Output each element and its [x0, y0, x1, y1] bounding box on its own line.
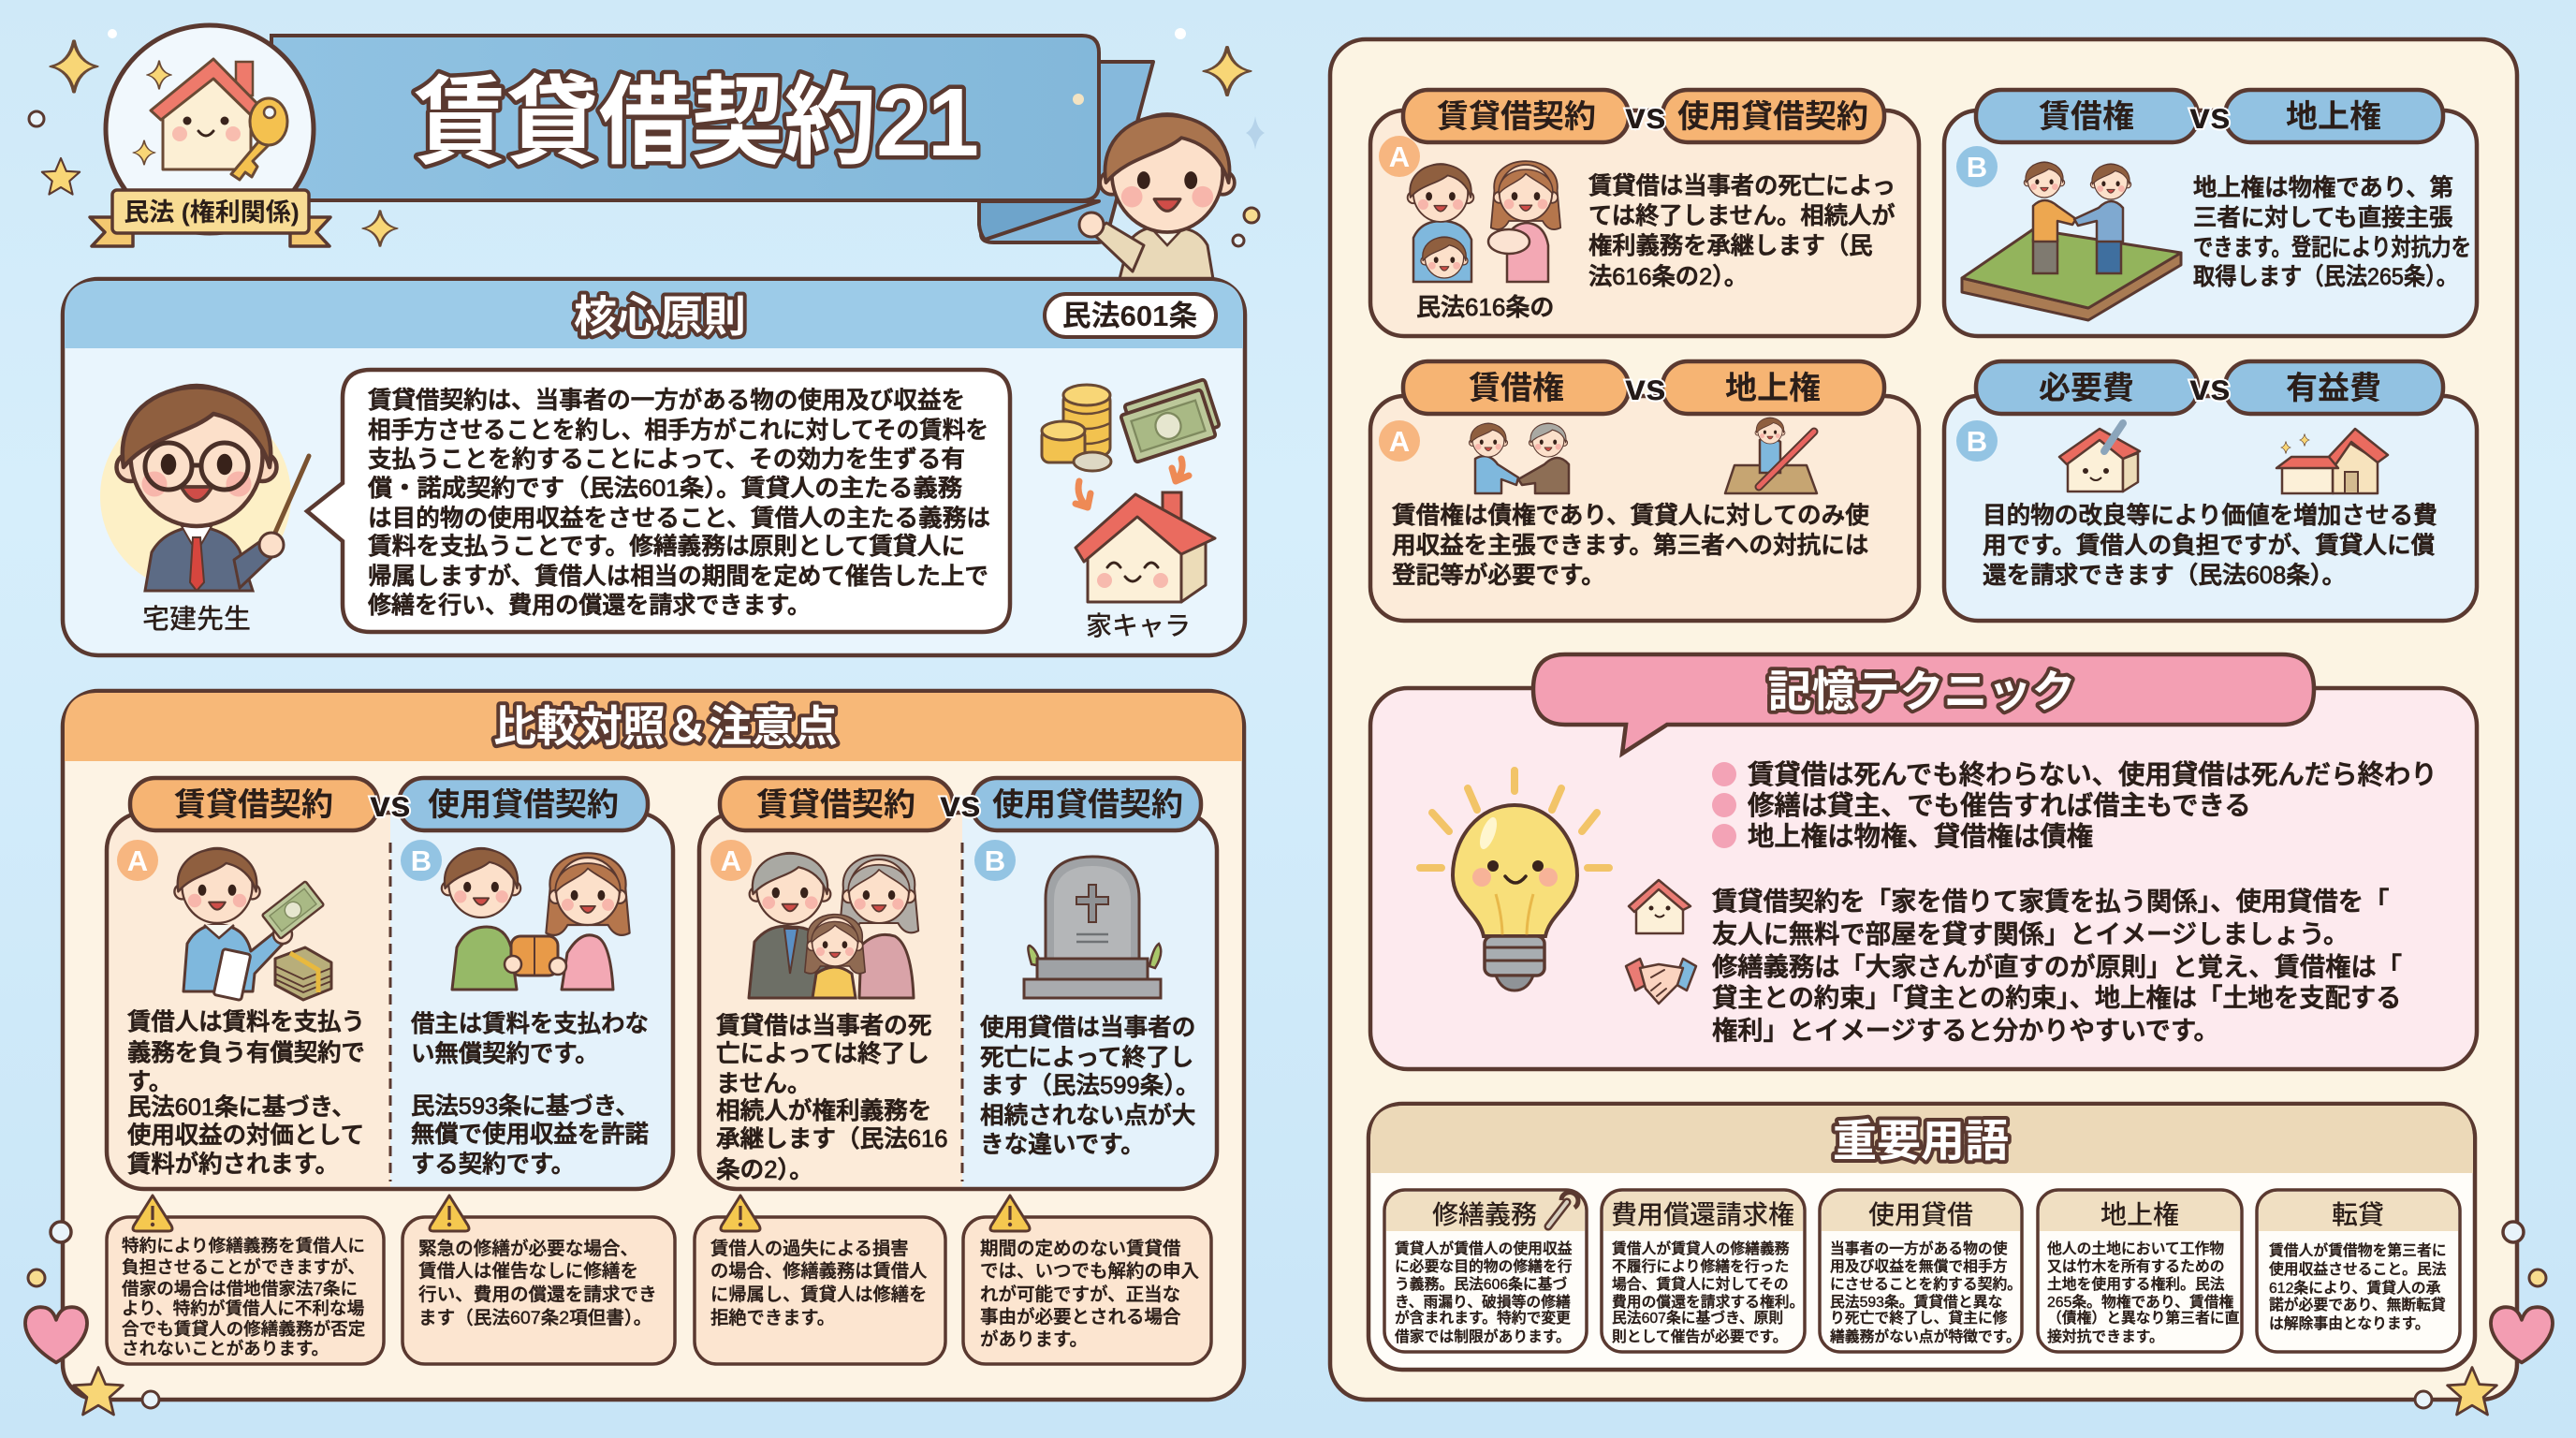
text: 取得します（民法265条）。 [2193, 264, 2458, 290]
badge B [1956, 420, 1998, 462]
speech bubble: 相手方させることを約し、相手方がこれに対してその賃料を [368, 418, 988, 444]
illustration: handshake with landlord [1469, 423, 1569, 493]
text: analogy: 友人に無料で部屋を貸す関係」とイメージしましょう。 [1712, 919, 2349, 948]
tab: 使用貸借契約: 使用貸借契約 [1677, 99, 1868, 135]
term card: 費用償還請求権: 則として催告が必要です。 [1612, 1328, 1788, 1345]
icon: coins and bills [1042, 379, 1220, 507]
badge A [117, 840, 158, 881]
warning note 1: されないことがあります。 [122, 1339, 329, 1358]
text: loan ends at death: きな違いです。 [980, 1131, 1145, 1158]
text: 賃借権は債権であり、賃貸人に対してのみ使 [1392, 502, 1869, 529]
text: loan ends at death: ます（民法599条）。 [980, 1072, 1200, 1099]
text: free loan contract: する契約です。 [411, 1152, 575, 1178]
tab: 賃貸借契約: 賃貸借契約 [1437, 99, 1596, 135]
category ribbon badge [90, 190, 330, 246]
term card: 地上権: 他人の土地において工作物 [2047, 1240, 2224, 1257]
card: lease right vs superficies [1944, 90, 2477, 336]
term card: 転貸: 諾が必要であり、無断転貸 [2269, 1296, 2446, 1313]
icon: warning triangle [990, 1196, 1030, 1231]
caption: 民法616条の [1416, 293, 1554, 321]
bullets: 賃貸借は死んでも終わらない、使用貸借は死んだら終わり [1748, 760, 2437, 790]
term card: 修繕義務: 賃貸人が賃借人の使用収益 [1395, 1240, 1573, 1257]
text: rent contract: 賃借人は賃料を支払う [127, 1009, 365, 1035]
term card: 転貸: 転貸 [2332, 1200, 2384, 1229]
core principle header bar [65, 281, 1243, 348]
term card: 地上権: 265条。物権であり、賃借権 [2047, 1294, 2234, 1311]
icon: warning triangle [721, 1196, 760, 1231]
term card: 費用償還請求権: 民法607条に基づき、原則 [1612, 1310, 1783, 1327]
text: analogy: 貸主との約束」「貸主との約束」、地上権は「土地を支配する [1712, 983, 2401, 1012]
bullets [1712, 760, 2437, 852]
heading: 重要用語: 重要用語 [1833, 1116, 2009, 1166]
text: analogy: 権利」とイメージすると分かりやすいです。 [1712, 1016, 2219, 1045]
warning note 1: 合でも賃貸人の修繕義務が否定 [122, 1319, 365, 1339]
card: necessary vs beneficial expenses [1944, 361, 2477, 621]
icon: warning triangle [430, 1196, 469, 1231]
text: ては終了しません。相続人が [1588, 203, 1895, 229]
illustration: lending for free [442, 848, 630, 990]
warning note 4 [963, 1196, 1211, 1364]
vs: vs [1625, 96, 1666, 137]
text: analogy: 賃貸借契約を「家を借りて家賃を払う関係」、使用貸借を「 [1712, 887, 2389, 916]
warning note 3: の場合、修繕義務は賃借人 [710, 1261, 927, 1282]
text: 登記等が必要です。 [1392, 562, 1605, 589]
text: lease survives death: 賃貸借は当事者の死 [716, 1012, 931, 1039]
speech bubble: 修繕を行い、費用の償還を請求できます。 [368, 593, 811, 619]
tab: 使用貸借契約 [399, 778, 648, 830]
tab: 賃貸借契約 [1403, 90, 1629, 142]
term card: 費用償還請求権: 不履行により修繕を行った [1612, 1258, 1789, 1275]
logo: house and key emblem [106, 25, 314, 233]
vs: vs [940, 785, 981, 825]
term card: 使用貸借: にさせることを約する契約。 [1830, 1276, 2022, 1293]
badge A [710, 840, 752, 881]
term card: 費用償還請求権 [1602, 1190, 1805, 1352]
tab: 賃貸借契約: 賃貸借契約 [174, 787, 333, 823]
term card: 費用償還請求権: 場合、賃貸人に対してその [1612, 1276, 1789, 1293]
text: 賃貸借は当事者の死亡によっ [1588, 173, 1895, 199]
vs: vs [370, 785, 411, 825]
text: 目的物の改良等により価値を増加させる費 [1983, 502, 2437, 529]
heading: 核心原則: 核心原則 [574, 292, 746, 341]
badge A [1379, 420, 1420, 462]
tab: 賃借権 [1403, 361, 1629, 414]
label: 宅建先生: 宅建先生 [142, 604, 251, 635]
header decorations [29, 28, 1265, 246]
comparison card 1 [107, 778, 673, 1189]
warning note 4: があります。 [980, 1329, 1088, 1350]
term card: 転貸: 612条により、賃貸人の承 [2269, 1280, 2441, 1297]
panel: memory technique [1370, 654, 2477, 1069]
warning note 1: 特約により修繕義務を賃借人に [122, 1236, 365, 1255]
vs: vs [2189, 96, 2231, 137]
illustration: repaired house [2059, 423, 2140, 492]
text: 三者に対しても直接主張 [2193, 205, 2452, 231]
term card: 修繕義務 [1384, 1190, 1587, 1352]
warning note 2: 賃借人は催告なしに修繕を [418, 1261, 638, 1282]
warning note 2: 行い、費用の償還を請求でき [418, 1284, 657, 1305]
term card: 地上権: 地上権 [2100, 1200, 2179, 1229]
text: lease survives death: 条の2）。 [716, 1156, 813, 1183]
text: free loan contract: 民法593条に基づき、 [411, 1093, 639, 1120]
badge A: A [1389, 425, 1410, 458]
term card: 転貸: 賃借人が賃借物を第三者に [2269, 1241, 2447, 1259]
heading: 比較対照＆注意点: 比較対照＆注意点 [493, 702, 838, 751]
character: waving boy [1079, 114, 1235, 279]
warning note 1: 負担させることができますが、 [122, 1257, 365, 1277]
warning note 1 [107, 1196, 384, 1364]
illustration: heirs [749, 853, 918, 998]
icon: handshake [1626, 959, 1696, 1004]
badge A: A [721, 844, 741, 877]
text: lease survives death: 亡によっては終了し [716, 1040, 929, 1067]
tab: 使用貸借契約 [972, 778, 1201, 830]
text: rent contract: 義務を負う有償契約で [127, 1040, 365, 1066]
text: lease survives death: 相続人が権利義務を [716, 1097, 931, 1124]
badge A: A [1389, 140, 1410, 173]
text: rent contract: す。 [127, 1069, 172, 1095]
tab: 地上権 [2225, 90, 2443, 142]
illustration: gravestone [1024, 857, 1161, 998]
term card: 修繕義務: 修繕義務 [1432, 1200, 1537, 1229]
icon: smiling light bulb [1420, 770, 1609, 990]
tab: 賃借権: 賃借権 [1469, 371, 1564, 406]
warning note 4: れが可能ですが、正当な [980, 1284, 1180, 1305]
warning note 3: 拒絶できます。 [710, 1308, 835, 1328]
term card: 地上権: 接対抗できます。 [2047, 1328, 2164, 1345]
term card: 修繕義務: う義務。民法606条に基づ [1395, 1276, 1568, 1293]
bullets: 地上権は物権、貸借権は債権 [1748, 822, 2093, 852]
character: house [1076, 492, 1215, 602]
warning note 3: に帰属し、賃貸人は修繕を [710, 1284, 927, 1305]
term card: 使用貸借: り死亡で終了し、貸主に修 [1830, 1310, 2008, 1327]
term card: 費用償還請求権: 費用償還請求権 [1611, 1200, 1794, 1229]
panel: comparison and notes [63, 691, 1244, 1400]
banner body [271, 36, 1099, 200]
term card: 使用貸借 [1820, 1190, 2022, 1352]
tab: 賃貸借契約: 賃貸借契約 [756, 787, 915, 823]
illustration: digging on land [1725, 418, 1817, 493]
tab: 賃借権: 賃借権 [2039, 99, 2134, 135]
term card: 転貸: は解除事由となります。 [2269, 1315, 2430, 1332]
term card: 転貸 [2257, 1190, 2460, 1352]
text: loan ends at death: 相続されない点が大 [980, 1102, 1195, 1129]
text: 用収益を主張できます。第三者への対抗には [1392, 532, 1868, 559]
tab: 賃貸借契約 [130, 778, 378, 830]
tab: 有益費 [2225, 361, 2443, 414]
warning note 2 [402, 1196, 675, 1364]
term card: 使用貸借: 繕義務がない点が特徴です。 [1830, 1328, 2021, 1345]
term card: 地上権 [2038, 1190, 2242, 1352]
category ribbon badge: 民法 (権利関係) [124, 198, 300, 227]
vs: vs [1625, 368, 1666, 408]
term card: 費用償還請求権: 費用の償還を請求する権利。 [1612, 1294, 1804, 1311]
speech bubble: は目的物の使用収益をさせること、賃借人の主たる義務は [368, 506, 990, 532]
text: rent contract: 賃料が約されます。 [127, 1152, 339, 1178]
tab: 使用貸借契約: 使用貸借契約 [428, 787, 619, 823]
text: free loan contract: い無償契約です。 [411, 1041, 599, 1067]
text [2193, 175, 2471, 290]
tab: 地上権 [1662, 361, 1884, 414]
warning note 2: 緊急の修繕が必要な場合、 [418, 1239, 638, 1259]
badge B: B [985, 844, 1005, 877]
tab: 賃貸借契約 [720, 778, 953, 830]
tab: 必要費 [1976, 361, 2198, 414]
tab: 有益費: 有益費 [2286, 371, 2381, 406]
term card: 使用貸借: 民法593条。賃貸借と異な [1830, 1294, 2002, 1311]
speech header [1533, 654, 2314, 754]
card: lease vs loan [1370, 90, 1919, 336]
text: 法616条の2）。 [1588, 264, 1748, 290]
warning note 1: より、特約が賃借人に不利な場 [122, 1299, 364, 1318]
badge B: B [1967, 151, 1987, 183]
text: loan ends at death: 死亡によって終了し [980, 1044, 1193, 1071]
panel: core principle [63, 279, 1245, 655]
text: 地上権は物権であり、第 [2193, 175, 2453, 201]
corner decorations [25, 1222, 2553, 1415]
illustration: tenant paying rent [174, 848, 331, 1001]
warning note 2: ます（民法607条2項但書）。 [418, 1308, 651, 1328]
tag: 民法601条: 民法601条 [1062, 300, 1197, 332]
key terms header bar [1370, 1106, 2473, 1173]
bullets: 修繕は貸主、でも催告すれば借主もできる [1748, 791, 2251, 821]
illustration: handshake on land [1962, 162, 2181, 320]
warning note 4: 事由が必要とされる場合 [980, 1307, 1181, 1328]
term card: 使用貸借: 用及び収益を無償で相手方 [1830, 1258, 2008, 1275]
speech bubble: 償・諾成契約です（民法601条）。賃貸人の主たる義務 [368, 476, 962, 502]
text: free loan contract: 無償で使用収益を許諾 [411, 1122, 649, 1148]
badge B [974, 840, 1016, 881]
tag: 民法601条 [1045, 294, 1216, 337]
icon: wrench [1548, 1193, 1578, 1226]
badge A: A [127, 844, 148, 877]
term card: 転貸: 使用収益させること。民法 [2269, 1261, 2447, 1278]
panel: key terms [1368, 1104, 2475, 1370]
term card: 費用償還請求権: 賃借人が賃貸人の修繕義務 [1612, 1240, 1790, 1257]
tab: 必要費: 必要費 [2039, 371, 2134, 406]
illustration: improved house [2276, 429, 2388, 493]
term card: 使用貸借: 使用貸借 [1868, 1200, 1973, 1229]
tab: 地上権: 地上権 [2286, 99, 2381, 135]
term card: 地上権: 土地を使用する権利。民法 [2047, 1276, 2225, 1293]
warning note 3: 賃借人の過失による損害 [710, 1239, 909, 1259]
warning note 4: 期間の定めのない賃貸借 [980, 1239, 1181, 1259]
speech bubble: 支払うことを約することによって、その効力を生ずる有 [368, 447, 965, 473]
badge B [1956, 146, 1998, 187]
card: lease right vs superficies (A) [1370, 361, 1919, 621]
text: lease survives death: ません。 [716, 1071, 812, 1097]
banner tail [981, 62, 1153, 242]
badge B: B [411, 844, 432, 877]
panel: right column [1330, 39, 2517, 1400]
icon: warning triangle [133, 1196, 172, 1231]
text: できます。登記により対抗力を [2193, 235, 2471, 261]
text: 還を請求できます（民法608条）。 [1983, 562, 2346, 589]
term card: 地上権: （債権）と異なり第三者に直 [2047, 1310, 2240, 1327]
warning note 4: では、いつでも解約の申入 [980, 1261, 1199, 1282]
term card: 使用貸借: 当事者の一方がある物の使 [1830, 1240, 2008, 1257]
speech bubble: 賃貸借契約は、当事者の一方がある物の使用及び収益を [368, 388, 965, 414]
title banner [271, 36, 1153, 242]
speech bubble: 賃料を支払うことです。修繕義務は原則として賃貸人に [368, 534, 965, 560]
character: teacher [100, 386, 309, 592]
comparison header bar [65, 693, 1242, 761]
badge B [401, 840, 442, 881]
text: 権利義務を承継します（民 [1588, 233, 1873, 259]
badge B: B [1967, 425, 1987, 458]
warning note 3 [695, 1196, 945, 1364]
tab: 使用貸借契約: 使用貸借契約 [992, 787, 1183, 823]
text: analogy: 修繕義務は「大家さんが直すのが原則」と覚え、賃借権は「 [1712, 952, 2402, 981]
tab: 使用貸借契約 [1662, 90, 1884, 142]
term card: 修繕義務: 借家では制限があります。 [1395, 1328, 1571, 1345]
tab: 地上権: 地上権 [1725, 371, 1821, 406]
warning note 1: 借家の場合は借地借家法7条に [122, 1279, 358, 1299]
text: loan ends at death: 使用貸借は当事者の [980, 1014, 1195, 1041]
illustration: family [1408, 161, 1560, 282]
icon: small house [1629, 880, 1690, 933]
speech header: 記憶テクニック [1767, 667, 2076, 716]
speech bubble [307, 370, 1010, 632]
text: lease survives death: 承継します（民法616 [716, 1125, 947, 1152]
tab: 賃借権 [1976, 90, 2198, 142]
vs: vs [2189, 368, 2231, 408]
speech bubble: 帰属しますが、賃借人は相当の期間を定めて催告した上で [368, 564, 988, 590]
label: 家キャラ: 家キャラ [1086, 611, 1191, 640]
text: 用です。賃借人の負担ですが、賃貸人に償 [1983, 532, 2435, 559]
badge A [1379, 136, 1420, 177]
term card: 地上権: 又は竹木を所有するための [2047, 1258, 2225, 1275]
text: rent contract: 民法601条に基づき、 [127, 1094, 356, 1121]
main title: 賃貸借契約21 [414, 68, 979, 176]
text: free loan contract: 借主は賃料を支払わな [411, 1011, 649, 1037]
comparison card 2 [699, 778, 1217, 1189]
text: rent contract: 使用収益の対価として [127, 1123, 364, 1149]
term card: 修繕義務: が含まれます。特約で変更 [1395, 1309, 1571, 1327]
term card: 修繕義務: に必要な目的物の修繕を行 [1395, 1258, 1573, 1275]
term card: 修繕義務: き、雨漏り、破損等の修繕 [1395, 1294, 1571, 1311]
